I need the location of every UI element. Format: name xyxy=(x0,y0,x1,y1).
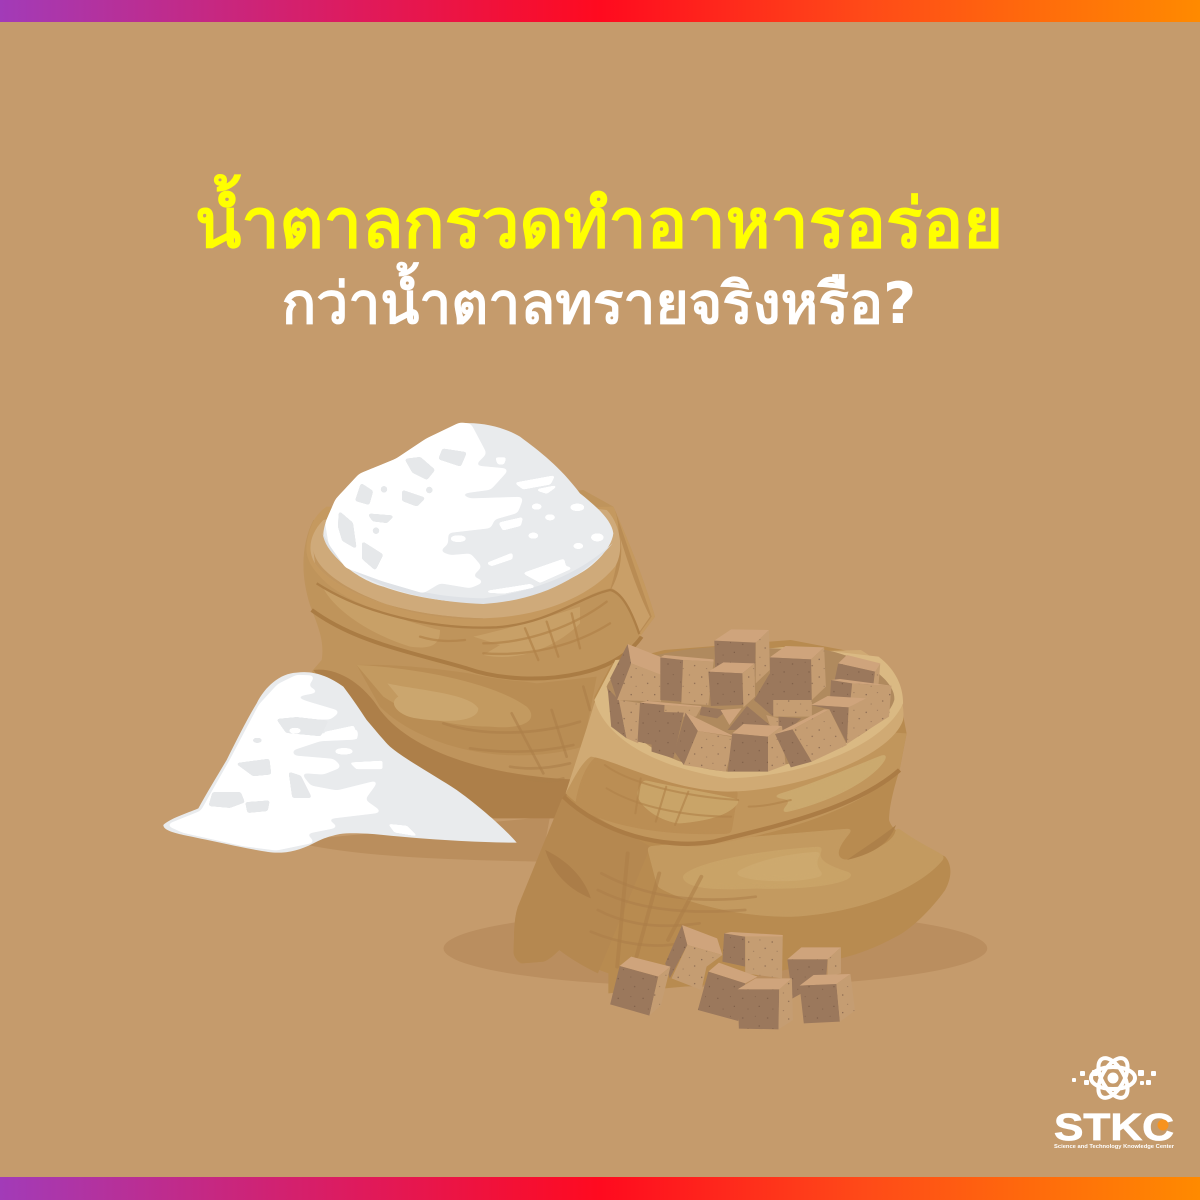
rim inner light band xyxy=(594,647,903,778)
sugar heap xyxy=(323,423,613,604)
cube bottom centre xyxy=(728,724,786,772)
inner flap light xyxy=(612,537,650,633)
sugar base xyxy=(323,423,613,603)
neck crease xyxy=(563,770,900,844)
sack flap xyxy=(306,507,655,637)
sack light patch xyxy=(357,665,531,727)
logo orange dot xyxy=(1158,1120,1168,1130)
pile white highlight xyxy=(168,676,380,849)
sack shadow on floor xyxy=(300,817,550,862)
flap under-edge line xyxy=(317,583,639,634)
loose cubes xyxy=(610,925,855,1029)
cube right tilted xyxy=(775,709,847,767)
body dark fold xyxy=(545,850,591,898)
loose cube G xyxy=(800,974,855,1023)
cube right xyxy=(830,679,891,737)
STKC logo xyxy=(1054,1053,1175,1150)
cube behind centre xyxy=(754,673,812,717)
cube pyramid xyxy=(721,706,770,730)
loose cube D xyxy=(698,963,757,1021)
neck weave lines xyxy=(420,602,610,660)
neck crease xyxy=(312,610,642,679)
flap band xyxy=(610,510,652,635)
cube mid right upper xyxy=(811,696,868,744)
sack lower shade xyxy=(313,670,583,818)
sugar grey flecks left xyxy=(339,450,465,568)
logo subtitle: Science and Technology Knowledge Center xyxy=(1054,1144,1175,1150)
loose cube F xyxy=(787,947,841,998)
sugar white highlight xyxy=(327,424,522,592)
lower body weave xyxy=(617,853,701,967)
sack body xyxy=(514,640,950,993)
bag neck xyxy=(566,713,907,847)
pile white flecks xyxy=(290,727,415,835)
cube far right xyxy=(835,655,880,687)
cube upper middle xyxy=(660,655,714,705)
rim xyxy=(310,493,620,618)
neck weave patch xyxy=(636,780,740,823)
bottom gradient bar xyxy=(0,1177,1200,1200)
body fold right xyxy=(847,825,896,860)
sugar white flecks right xyxy=(452,458,603,593)
logo atom emblem xyxy=(1072,1053,1156,1103)
cube dark shadow xyxy=(700,707,728,718)
cube back top xyxy=(714,629,770,683)
sack neck xyxy=(306,553,640,682)
loose cube A xyxy=(610,957,670,1016)
ground shadow xyxy=(444,910,987,987)
cube low left xyxy=(608,688,642,743)
cube low small xyxy=(766,715,801,733)
body left shade xyxy=(514,797,650,973)
cube big right xyxy=(770,646,826,700)
neck light patch xyxy=(323,588,440,648)
sack highlight patch xyxy=(387,683,478,721)
cubes inside sack xyxy=(608,629,891,772)
loose cube C xyxy=(722,932,783,978)
lower weave rings xyxy=(591,873,756,946)
neck right light patch xyxy=(770,753,887,813)
cube centre xyxy=(708,662,755,707)
top gradient bar xyxy=(0,0,1200,22)
loose cube E xyxy=(737,978,793,1029)
neck dark panel xyxy=(575,753,738,834)
body top highlight xyxy=(735,852,824,881)
title line 1: น้ำตาลกรวดทำอาหารอร่อย xyxy=(195,173,1003,264)
cube low mid xyxy=(652,712,684,758)
sack weave lines xyxy=(443,687,590,781)
neck light patch right xyxy=(473,607,580,657)
pile base xyxy=(163,672,517,853)
sack interior xyxy=(607,647,894,772)
body highlight xyxy=(682,847,852,889)
sack mid shade xyxy=(357,665,597,755)
sack of white sugar xyxy=(300,423,655,862)
cube top left xyxy=(610,644,662,702)
logo wordmark: STKC xyxy=(1054,1107,1174,1149)
cube large tilted xyxy=(674,713,735,772)
body light area xyxy=(647,823,945,917)
pile grey flecks xyxy=(210,718,327,812)
cube low mid left xyxy=(638,701,701,747)
pile of white sugar xyxy=(163,672,517,853)
sack of brown sugar xyxy=(444,629,987,1029)
sack body xyxy=(303,490,655,818)
loose cube B xyxy=(665,925,722,990)
neck weave lines xyxy=(605,765,791,825)
title xyxy=(195,173,1003,337)
rim dark edge xyxy=(313,550,483,619)
sugar bottom edge xyxy=(323,533,613,604)
rim lip xyxy=(566,650,904,793)
title line 2: กว่าน้ำตาลทรายจริงหรือ? xyxy=(282,262,916,337)
